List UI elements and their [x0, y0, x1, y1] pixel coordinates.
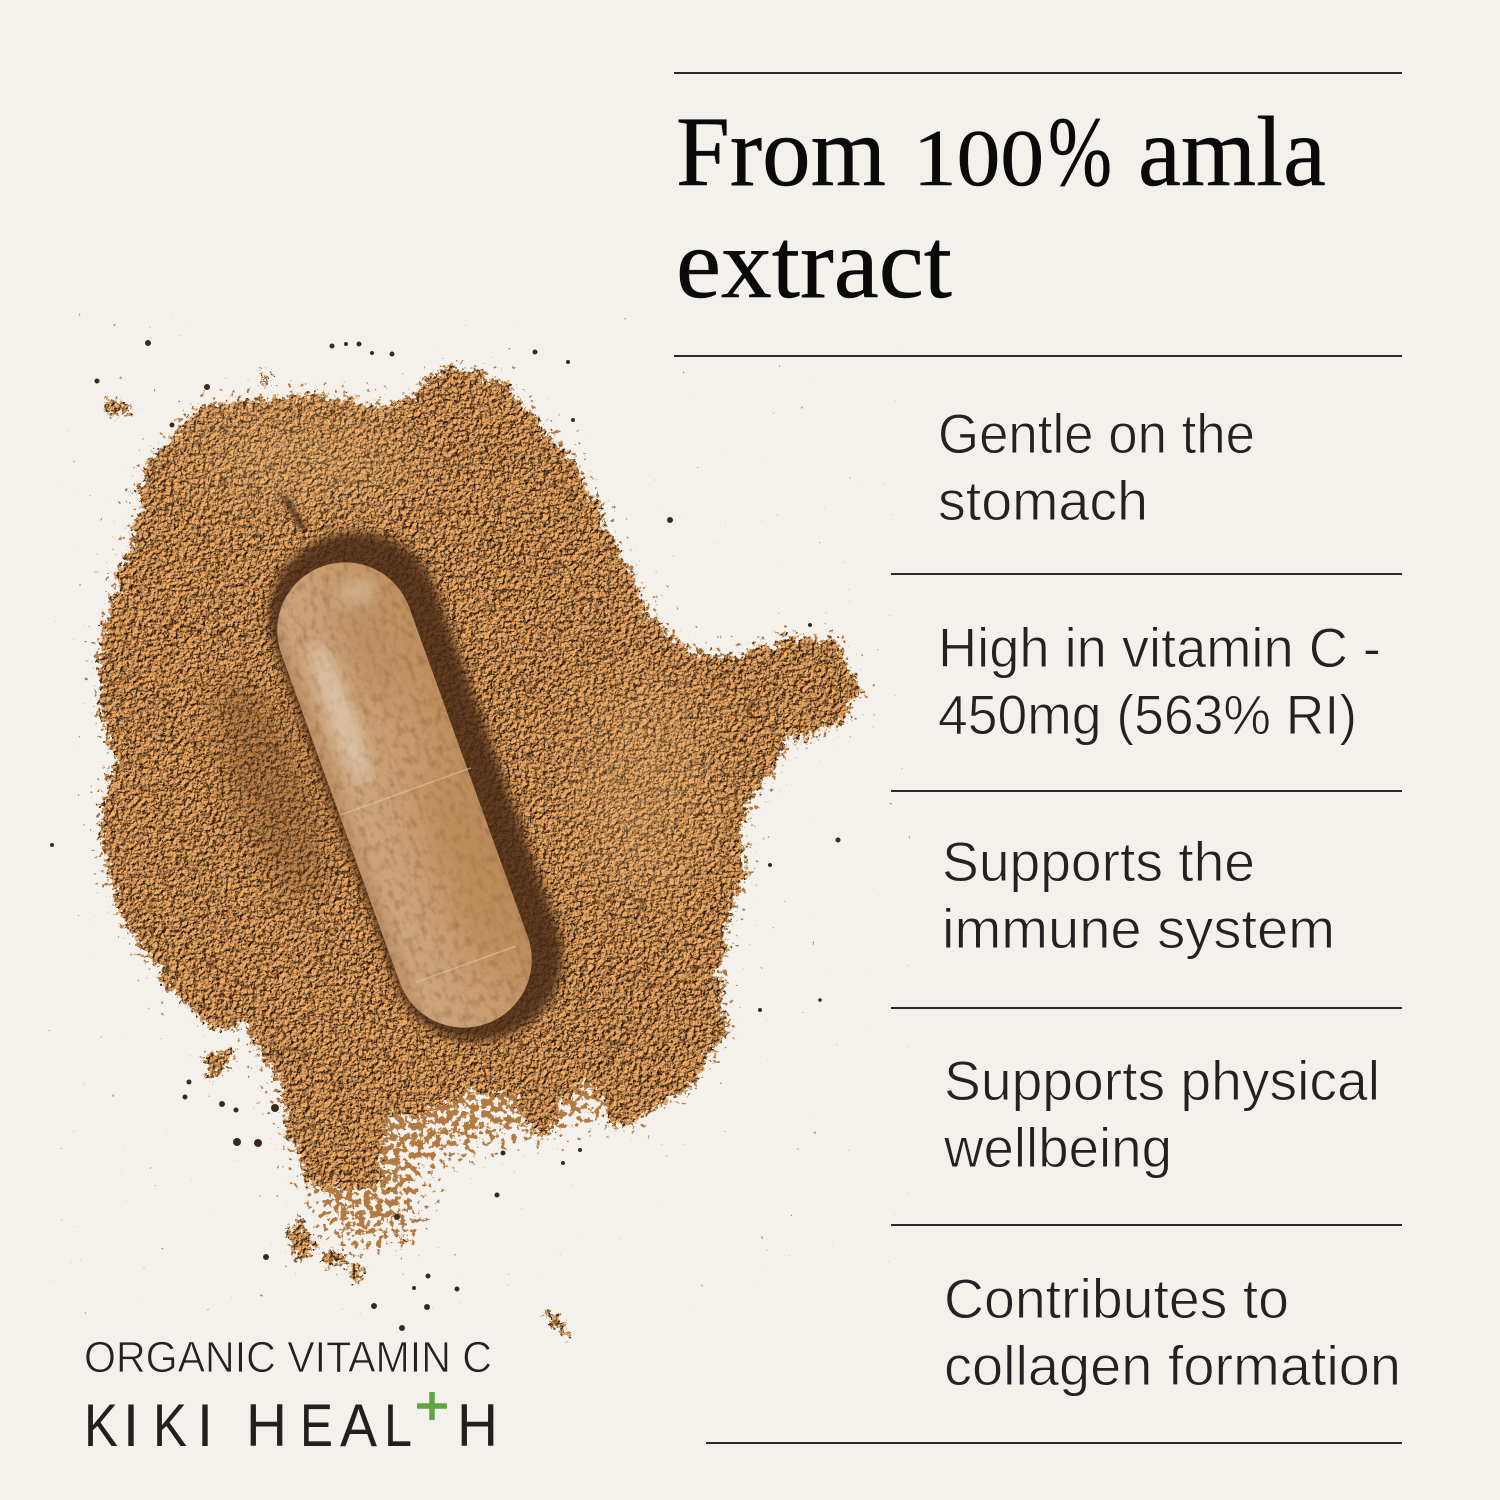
logo: Kiki Health: L: [384, 1392, 412, 1459]
benefit: contributes to collagen formation: [944, 1267, 1401, 1397]
logo: Kiki Health: I: [123, 1392, 139, 1459]
benefit: gentle on the stomach: [938, 402, 1255, 532]
logo: Kiki Health: E: [300, 1392, 333, 1459]
scattered powder crumbs: [95, 363, 865, 1260]
dark tick in powder: [286, 500, 302, 526]
capsule seam: [341, 768, 533, 987]
powder tonal shading: [180, 410, 710, 900]
divider: [891, 790, 1402, 792]
capsule: [277, 562, 532, 1028]
hollow shadow around capsule: [195, 508, 587, 1065]
heading rule bottom: [674, 355, 1402, 357]
divider: [891, 1224, 1402, 1226]
logo: Kiki Health: I: [197, 1392, 213, 1459]
heading: [676, 96, 1326, 319]
heading: %: [1048, 96, 1112, 207]
heading rule top: [674, 72, 1402, 74]
dark pepper specks: [50, 340, 840, 1331]
benefit: contributes to collagen formation: Contributes to: [944, 1267, 1289, 1330]
benefit: high in vitamin C: [938, 616, 1381, 746]
benefit: contributes to collagen formation: collagen formation: [944, 1334, 1401, 1397]
benefit: gentle on the stomach: Gentle on the: [938, 402, 1255, 465]
logo: Kiki Health: K: [84, 1392, 118, 1459]
benefit: supports physical wellbeing: wellbeing: [943, 1116, 1172, 1179]
logo: Kiki Health: H: [246, 1392, 287, 1459]
icon: green plus: [417, 1392, 447, 1420]
photo: amla powder with capsule: [50, 340, 865, 1336]
divider bottom: [706, 1442, 1402, 1444]
benefit: high in vitamin C: High in vitamin C -: [938, 616, 1381, 679]
product name: ORGANIC VITAMIN C: [84, 1333, 492, 1382]
logo: Kiki Health: A: [340, 1392, 377, 1459]
logo: Kiki Health: H: [457, 1392, 498, 1459]
divider: [891, 573, 1402, 575]
powder pile: [98, 368, 860, 1336]
benefit: supports physical wellbeing: Supports physical: [944, 1049, 1380, 1112]
heading: amla: [1138, 96, 1326, 207]
benefit: supports physical wellbeing: [943, 1049, 1380, 1179]
heading: extract: [676, 208, 952, 319]
benefit: supports the immune system: Supports the: [942, 830, 1255, 893]
benefit: supports the immune system: [942, 830, 1335, 960]
benefit: high in vitamin C: 450mg (563% RI): [938, 683, 1357, 746]
benefit: gentle on the stomach: stomach: [938, 469, 1148, 532]
logo: Kiki Health: K: [153, 1392, 187, 1459]
benefit: supports the immune system: immune system: [942, 897, 1335, 960]
logo: Kiki Health: [84, 1392, 498, 1459]
heading: From: [676, 96, 886, 207]
divider: [891, 1007, 1402, 1009]
heading: 100: [913, 115, 1044, 203]
